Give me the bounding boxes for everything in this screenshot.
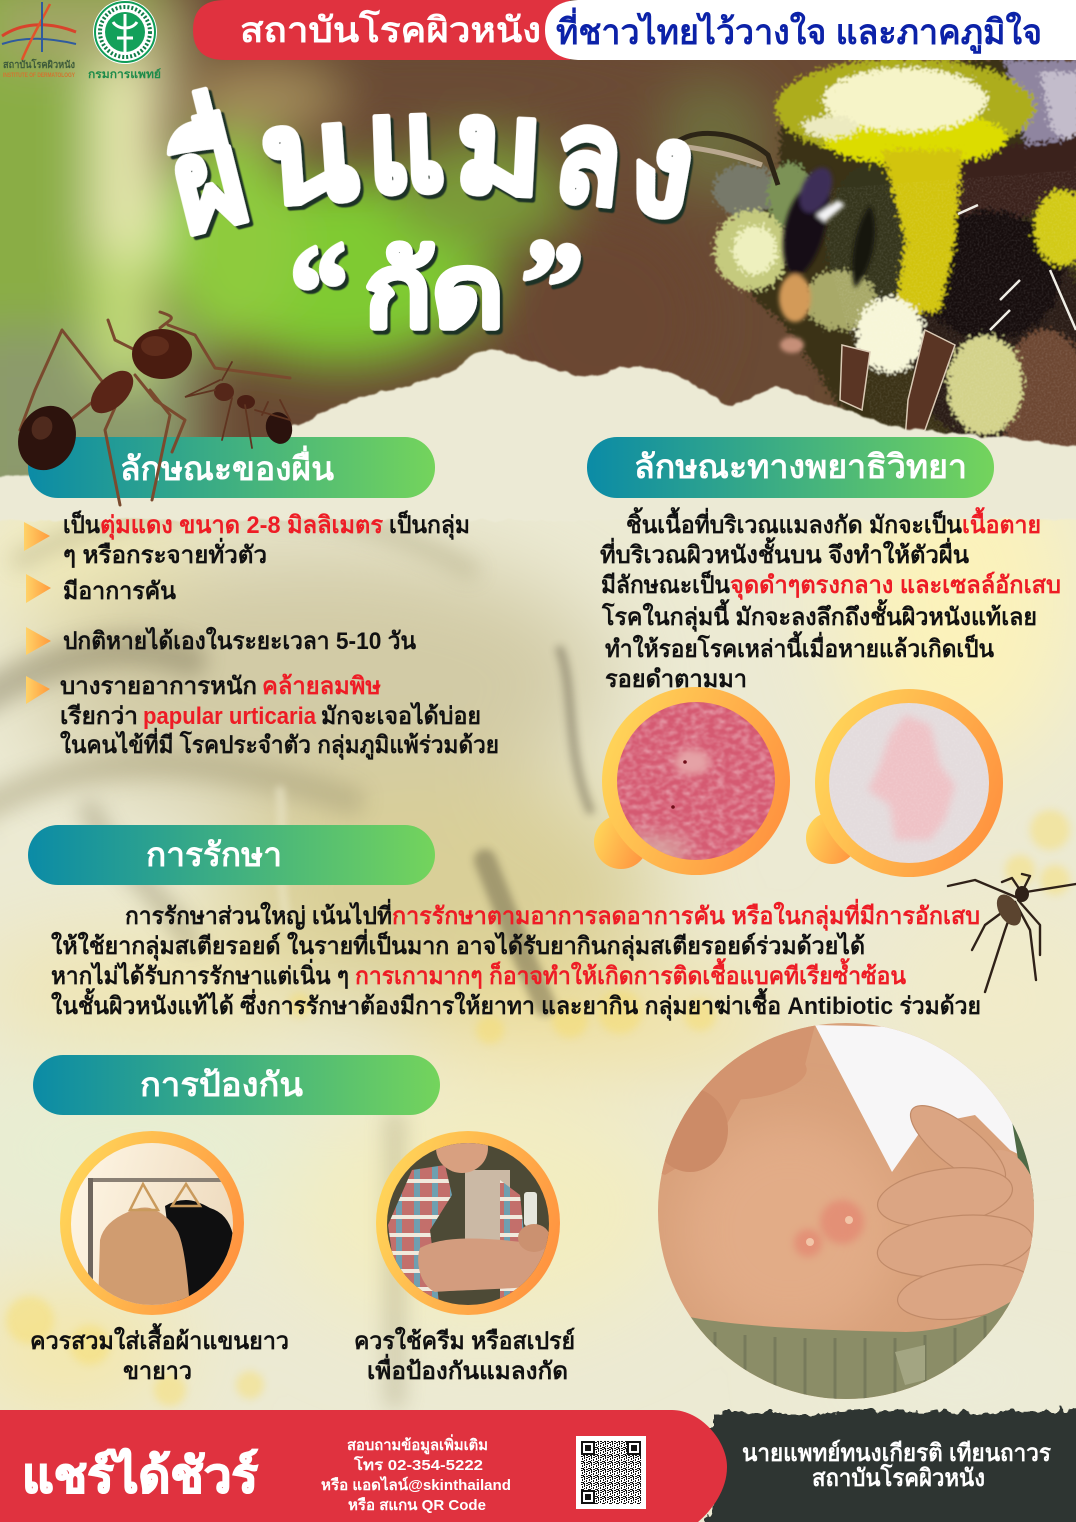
photo: red rash skin [594,687,790,875]
text: rash description: ในคนไข้ที่มี โรคประจำตัว กลุ่มภูมิแพ้ร่วมด้วย [60,727,499,761]
panel: rash characteristics [24,437,499,761]
text: pathology description: ชิ้นเนื้อที่บริเวณแมลงกัด มักจะเป็น [626,506,963,539]
text: treatment description [51,898,981,1022]
caption: spray [354,1326,575,1385]
contact details: สอบถามข้อมูลเพิ่มเติม [347,1434,488,1455]
text: treatment description: การรักษาตามอาการลดอาการคัน หรือในกลุ่มที่มีการอักเสบ [392,898,980,932]
text: rash description: ปกติหายได้เองในระยะเวลา 5-10 วัน [63,626,417,655]
title: skin rash from insects: ผื่ [153,85,261,261]
logo: department of medical services [88,0,161,81]
heading: prevention: การป้องกัน [140,1066,303,1103]
text: pathology description: รอยดำตามมา [605,666,747,693]
bee antenna [677,133,778,185]
heading: rash characteristics: ลักษณะของผื่น [120,445,334,487]
photo: applying spray [376,1123,560,1315]
footer: doctor name band [704,1408,1076,1522]
text: pathology description: มีลักษณะเป็น [601,570,731,599]
photo: long sleeve clothes [60,1131,244,1315]
text: pathology description: จุดดำๆตรงกลาง และเซลล์อักเสบ [730,571,1061,601]
header left text: สถาบันโรคผิวหนัง [240,9,541,50]
header banner [193,0,1076,60]
bee fur speckle [824,170,1076,446]
background: blurred green and brown photo [0,0,1076,520]
logo: institute of dermatology [2,2,76,79]
heading: treatment: การรักษา [146,836,282,873]
title: skin rash from insects: แ [364,71,447,220]
shorts [690,1302,1011,1399]
text: pathology description: ทำให้รอยโรคเหล่านี้เมื่อหายแล้วเกิดเป็น [605,630,995,663]
contact details: หรือ แอดไลน์@skinthailand [321,1475,511,1494]
text: rash description: เป็น [63,510,101,539]
panel: pathology [587,437,1061,877]
text: treatment description: ในชั้นผิวหนังแท้ได้ ซึ่งการรักษาต้องมีการให้ยาทา และยากิน กลุ่มยาฆ่าเชื้อ Antibiotic ร่วมด้วย [51,987,981,1022]
text: rash description: มักจะเจอได้บ่อย [321,701,481,730]
title: skin rash from insects: ” [510,211,589,362]
title: skin rash from insects [153,71,706,366]
title: skin rash from insects: ม [452,72,547,223]
heading: pathology: ลักษณะทางพยาธิวิทยา [634,448,967,485]
caption: spray: เพื่อป้องกันแมลงกัด [367,1353,568,1385]
image: bumblebee [677,57,1076,470]
text: pathology description [600,506,1061,693]
text: rash description [60,510,499,761]
text: pathology description: ที่บริเวณผิวหนังชั้นบน จึงทำให้ตัวผื่น [600,536,970,569]
doctor name: สถาบันโรคผิวหนัง [812,1463,985,1492]
logo: department of medical services: กรมการแพทย์ [88,68,161,81]
text: rash description: คล้ายลมพิษ [262,673,381,700]
text: rash description: เรียกว่า [60,703,138,730]
title: skin rash from insects: ง [619,92,706,246]
title: skin rash from insects: ล [547,81,630,233]
title: skin rash from insects: “ [282,215,361,366]
caption: clothes [30,1322,289,1385]
text: rash description: ๆ หรือกระจายทั่วตัว [63,537,267,569]
caption: clothes: ขายาว [123,1358,192,1385]
QR code [576,1436,646,1509]
caption: clothes: ควรสวมใส่เสื้อผ้าแขนยาว [30,1322,289,1355]
doctor name [742,1439,1051,1492]
hand left [650,1025,815,1175]
hand right [876,1105,1034,1336]
bee legs [840,330,955,440]
shirt [815,1025,1040,1172]
logo: institute of dermatology: INSTITUTE OF DERMATOLOGY [3,73,75,79]
photo: insect bite on skin [650,1020,1046,1405]
caption: spray: ควรใช้ครีม หรือสเปรย์ [354,1326,575,1355]
contact details: โทร 02-354-5222 [353,1455,483,1474]
panel: treatment [28,825,981,1022]
text: treatment description: หากไม่ได้รับการรักษาแต่เนิ่น ๆ [51,958,349,990]
logo: institute of dermatology: สถาบันโรคผิวหนัง [3,58,75,71]
image: ants [8,312,296,505]
text: treatment description: การรักษาส่วนใหญ่ เน้นไปที่ [125,898,392,930]
text: rash description: เป็นกลุ่ม [389,510,470,541]
text: treatment description: ให้ใช้ยากลุ่มสเตียรอยด์ ในรายที่เป็นมาก อาจได้รับยากินกลุ่มสเตียรอยด์ร่วมด้วยได้ [51,928,865,962]
share slogan: แชร์ได้ชัวร์ [22,1447,258,1503]
text: rash description: papular urticaria [143,703,317,730]
panel: prevention [30,1020,1046,1405]
photo: pale rash skin [806,689,1003,877]
background: cream powder mound [0,349,1076,520]
heading: pathology [587,437,994,498]
bullet icons [24,522,51,704]
faded pollen blobs [6,456,1070,1406]
text: rash description: ตุ่มแดง ขนาด 2-8 มิลลิเมตร [100,512,383,541]
text: pathology description: โรคในกลุ่มนี้ มักจะลงลึกถึงชั้นผิวหนังแท้เลย [601,598,1037,633]
bite spots [820,1200,864,1244]
heading: rash characteristics [28,437,435,498]
text: rash description: บางรายอาการหนัก [60,673,257,700]
title: skin rash from insects: กัด [364,234,504,348]
doctor name: นายแพทย์ทนงเกียรติ เทียนถาวร [742,1439,1051,1467]
heading: prevention [33,1055,440,1115]
text: pathology description: เนื้อตาย [962,506,1041,539]
footer: red band [0,1410,727,1522]
faded bee body [0,509,590,1400]
text: rash description: มีอาการคัน [63,578,177,605]
heading: treatment [28,825,435,885]
title: skin rash from insects: น [256,80,362,232]
header right text: ที่ชาวไทยไว้วางใจ และภาคภูมิใจ [556,7,1042,54]
contact details: หรือ สแกน QR Code [348,1497,486,1514]
image: spider [948,874,1076,992]
contact details [321,1434,511,1514]
text: treatment description: การเกามากๆ ก็อาจทำให้เกิดการติดเชื้อแบคทีเรียซ้ำซ้อน [355,957,907,990]
